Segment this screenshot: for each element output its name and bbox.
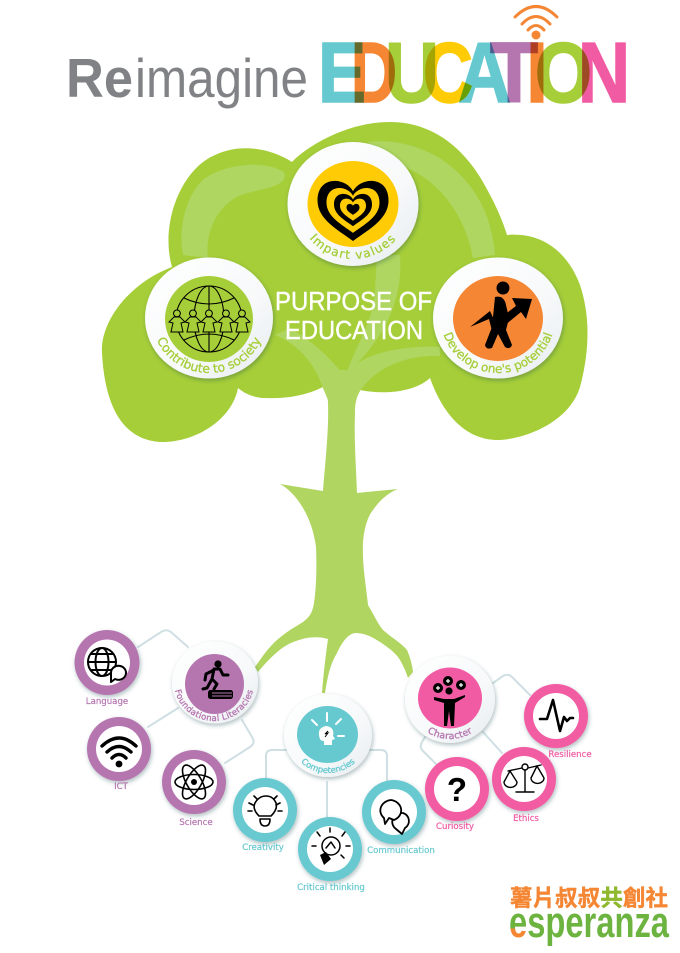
panel: resilience <box>524 684 592 760</box>
label: science: Science <box>179 818 213 828</box>
icon: atom <box>175 762 213 802</box>
label: language: Language <box>86 697 128 707</box>
logo text: Chinese name: 薯片叔叔共創社 <box>510 886 668 911</box>
heading: EDUCATION <box>318 26 630 121</box>
icon: head with light rays <box>312 713 344 745</box>
icon: wifi signal <box>515 6 557 40</box>
heading: purpose of education <box>275 286 432 345</box>
title <box>66 6 630 121</box>
tree trunk and roots <box>255 370 413 693</box>
label: competencies: Competencies <box>302 758 354 774</box>
label: develop one's potential: Develop one's potential <box>444 332 552 374</box>
label: curiosity: Curiosity <box>436 822 474 832</box>
heading: purpose of education: PURPOSE OF <box>275 286 432 316</box>
panel: language <box>74 630 140 707</box>
label: resilience: Resilience <box>548 750 592 760</box>
icon: globe with people <box>169 286 250 352</box>
panel: critical thinking <box>297 817 365 893</box>
label: communication: Communication <box>367 846 435 856</box>
heading: EDUCATION: C <box>423 26 473 121</box>
icon: idea bulb <box>312 828 350 865</box>
label: critical thinking: Critical thinking <box>297 883 365 893</box>
panel: develop one's potential <box>432 258 566 382</box>
icon: heartbeat <box>540 700 573 731</box>
label: creativity: Creativity <box>242 843 284 853</box>
icon: balance scales <box>504 764 544 792</box>
icon: globe with speech bubble <box>88 648 126 682</box>
label: ict: ICT <box>114 782 129 792</box>
label: impart values: Impart values <box>310 233 395 259</box>
icon: runner on books <box>203 660 233 699</box>
icon: light bulb <box>248 796 282 826</box>
heading: purpose of education: EDUCATION <box>285 315 423 345</box>
panel: competencies <box>282 694 376 782</box>
panel: science <box>162 750 226 828</box>
icon: wifi <box>102 738 136 767</box>
logo: esperanza <box>509 886 669 947</box>
panel: contribute to society <box>144 258 276 382</box>
heading: EDUCATION: O <box>535 26 592 121</box>
heading: EDUCATION: E <box>318 26 366 121</box>
panel: foundational literacies <box>170 641 262 728</box>
panel: impart values <box>286 142 422 270</box>
panel: communication <box>362 780 435 856</box>
tree branches <box>181 141 495 400</box>
heading: Reimagine: imagine <box>135 47 308 109</box>
label: contribute to society: Contribute to society <box>158 336 262 374</box>
label: foundational literacies: Foundational Literacies <box>175 689 253 722</box>
heading: EDUCATION: U <box>385 26 439 121</box>
heading: EDUCATION: N <box>578 26 630 121</box>
icon: speech bubbles <box>380 800 409 834</box>
panel: ethics <box>492 747 556 824</box>
panel: curiosity <box>425 757 489 832</box>
icon: concentric heart <box>318 181 388 241</box>
label: character: Character <box>428 728 471 740</box>
heading: EDUCATION: A <box>458 26 511 121</box>
label: ethics: Ethics <box>513 814 539 824</box>
heading: EDUCATION: D <box>351 26 397 121</box>
icon: question mark: ? <box>447 771 467 808</box>
tree crown <box>102 122 587 442</box>
panel: creativity <box>233 778 297 853</box>
connector lines <box>138 630 530 817</box>
icon: walker with rising arrow <box>470 282 532 349</box>
panel: character <box>404 656 498 748</box>
panel: ict <box>87 717 151 792</box>
heading: EDUCATION: I <box>526 26 548 121</box>
icon: person juggling <box>433 676 466 726</box>
heading: EDUCATION: T <box>490 26 538 121</box>
heading: Reimagine: Re <box>66 47 133 109</box>
